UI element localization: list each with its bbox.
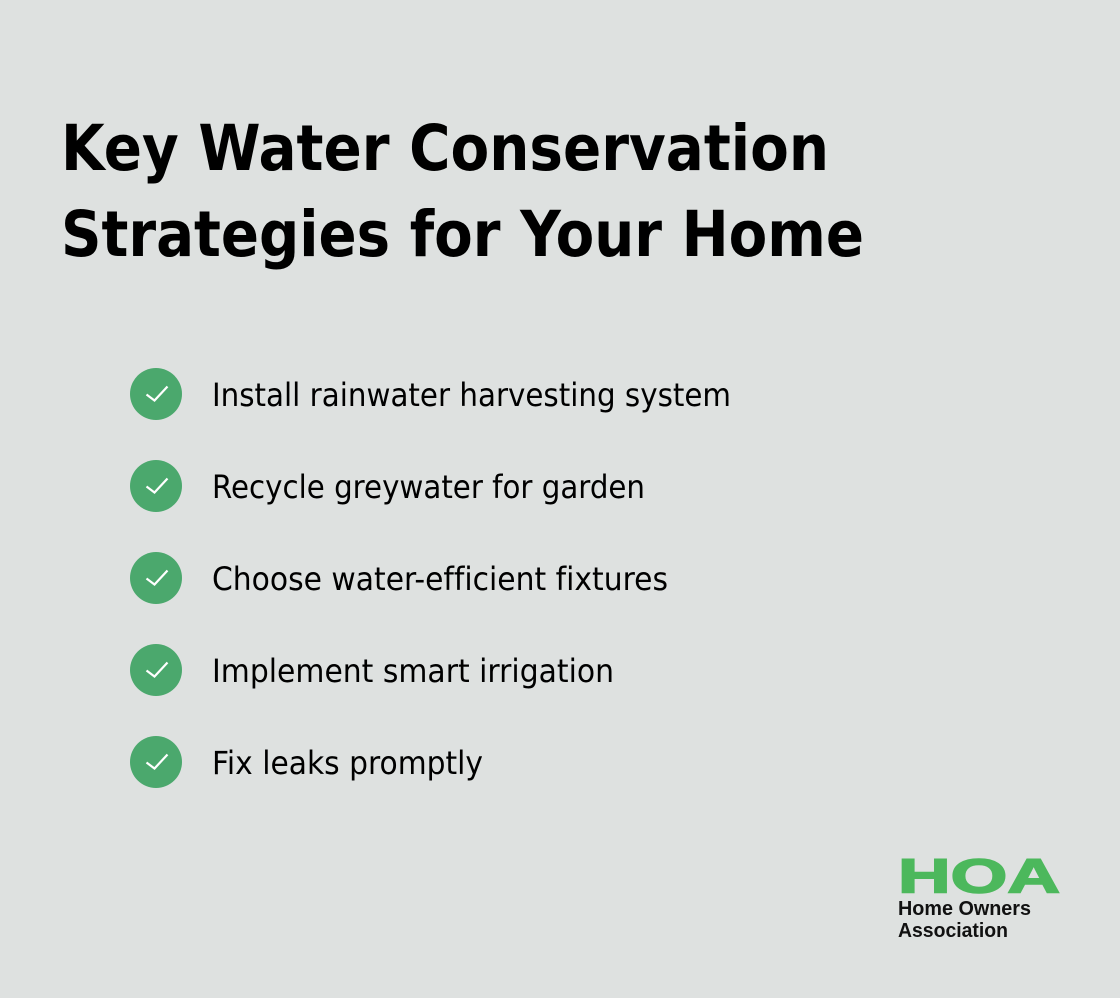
item: greywater xyxy=(130,460,645,512)
item: leaks: Fix leaks promptly xyxy=(212,744,483,782)
item: smart irrigation: Implement smart irrigation xyxy=(212,652,614,690)
item: rainwater harvesting xyxy=(130,368,731,420)
logo: HOA Home Owners Association xyxy=(898,850,1060,942)
logo: HOA Home Owners Association: Home Owners xyxy=(898,898,1031,920)
logo: HOA Home Owners Association: Association xyxy=(898,920,1008,942)
title: Strategies for Your Home xyxy=(61,198,864,271)
item: smart irrigation xyxy=(130,644,614,696)
item: fixtures xyxy=(130,552,668,604)
item: fixtures: Choose water-efficient fixtures xyxy=(212,560,668,598)
title xyxy=(61,112,864,271)
item: leaks xyxy=(130,736,483,788)
logo: HOA Home Owners Association: HOA xyxy=(898,850,1060,904)
item: greywater: Recycle greywater for garden xyxy=(212,468,645,506)
title: Key Water Conservation xyxy=(61,112,829,185)
item: rainwater harvesting: Install rainwater harvesting system xyxy=(212,376,731,414)
checklist xyxy=(130,368,731,788)
